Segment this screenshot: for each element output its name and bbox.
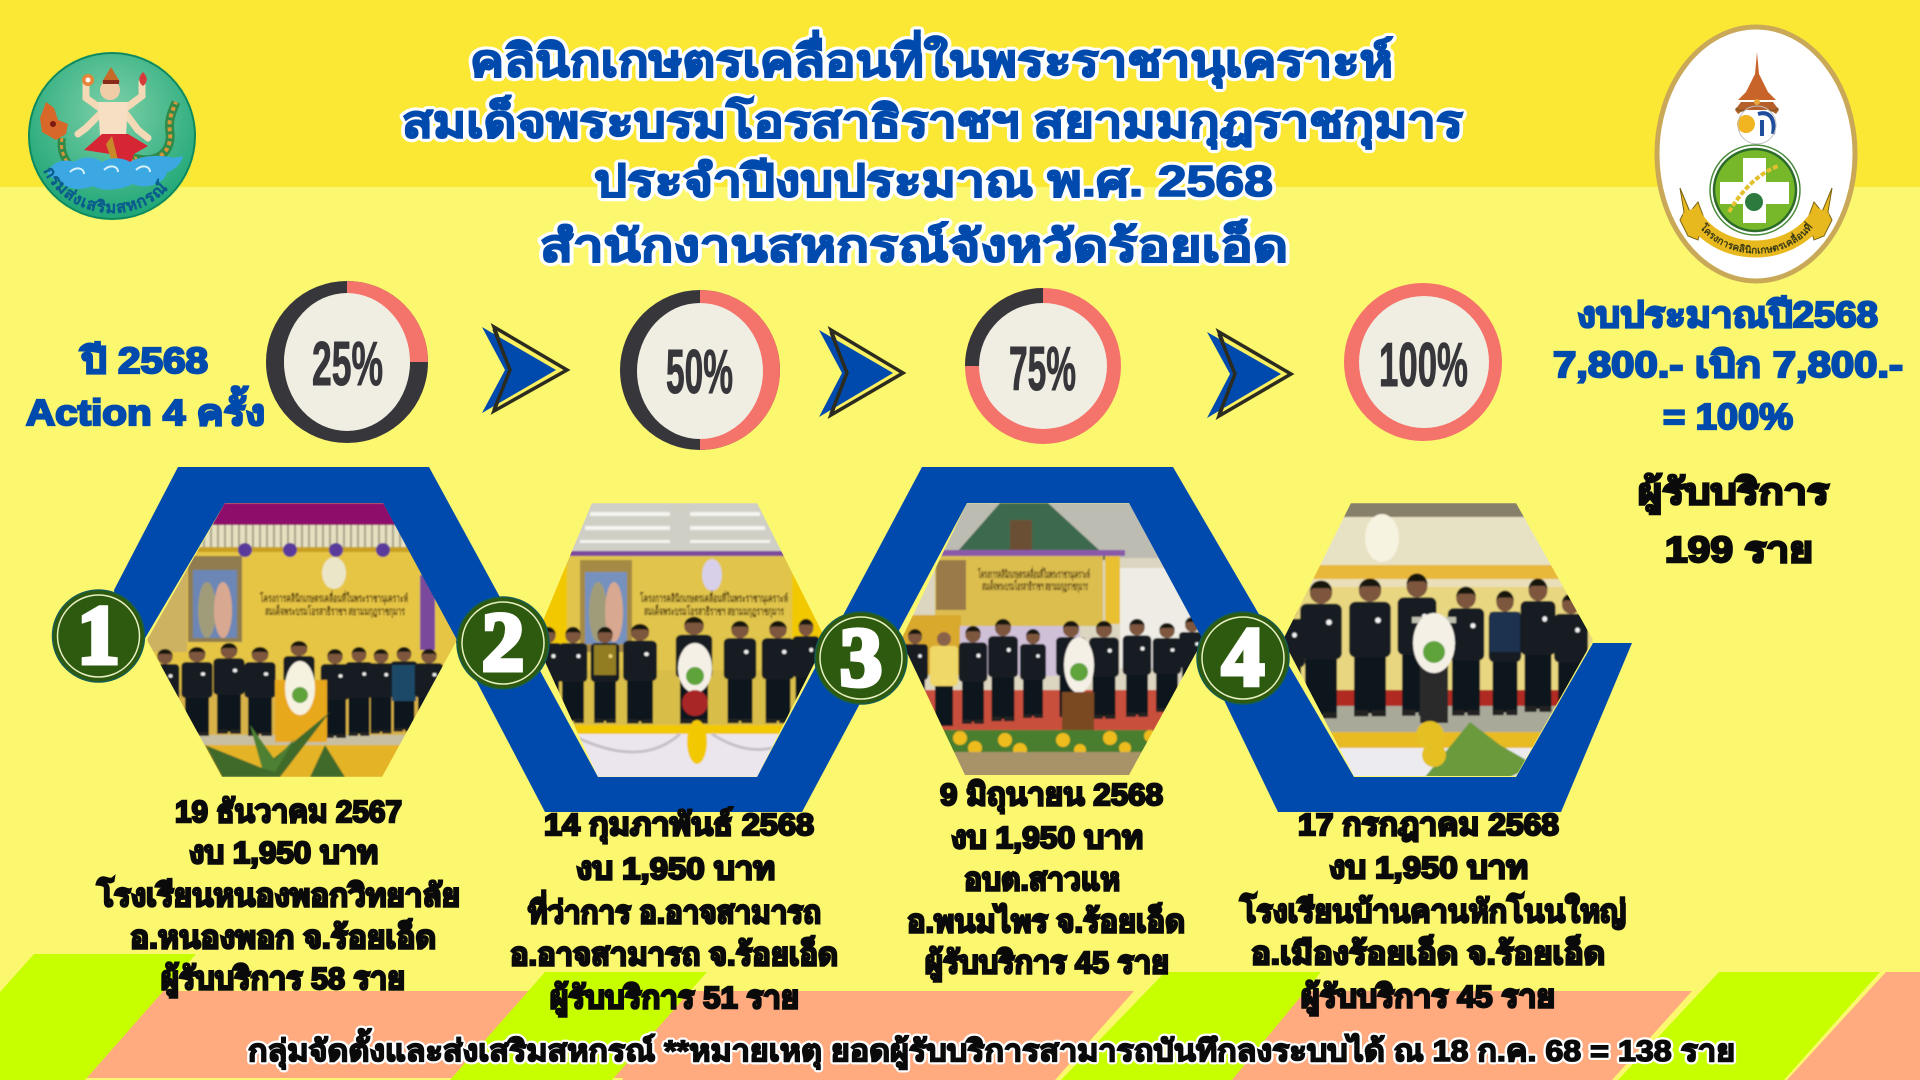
logo: Cooperative Promotion Department seal: กรมส่งเสริมสหกรณ์ [43,168,168,214]
number badge 3 [815,611,907,704]
event 4 details [1239,807,1626,1016]
event 2 details [510,807,838,1017]
title: ประจำปีงบประมาณ พ.ศ. 2568 [594,157,1273,206]
event 1 details: งบ 1,950 บาท [189,835,378,870]
title [402,30,1463,271]
event 1 details: อ.หนองพอก จ.ร้อยเอ็ด [130,918,436,955]
footer colour bands [0,954,1920,1080]
header band [0,0,1920,187]
deity arms [78,82,148,138]
number badge 1: 1 [78,589,120,682]
event 4 details: ผู้รับบริการ 45 ราย [1301,979,1555,1016]
event 1 details: โรงเรียนหนองพอกวิทยาลัย [96,877,460,913]
left label: year and actions [26,340,265,433]
event 1 details: ผู้รับบริการ 58 ราย [161,961,405,998]
photo 4 [1271,503,1593,777]
event 2 details: งบ 1,950 บาท [576,851,775,886]
gold banner [1680,188,1832,240]
photo 1: สมเด็จพระบรมโอรสาธิราชฯ สยามมกุฎราชกุมาร [265,604,405,619]
photo 1 [147,503,457,777]
photo 2 [534,503,826,777]
service recipients total: ผู้รับบริการ [1638,471,1830,515]
budget summary: = 100% [1663,396,1793,437]
footer note: กลุ่มจัดตั้งและส่งเสริมสหกรณ์ **หมายเหตุ ยอดผู้รับบริการสามารถบันทึกลงระบบได้ ณ 18 ก.ค. 68 = 138 ราย [248,1028,1735,1070]
photo 2: โครงการคลินิกเกษตรเคลื่อนที่ในพระราชานุเคราะห์ [639,590,788,606]
title: คลินิกเกษตรเคลื่อนที่ในพระราชานุเคราะห์ [470,30,1393,89]
attributes in hands [82,74,94,86]
number badge 2 [457,596,549,689]
logo: mobile agricultural clinic project [1654,24,1858,284]
spire [1738,52,1776,100]
event 3 details: งบ 1,950 บาท [951,820,1143,855]
monogram [1737,115,1755,133]
event 2 details: 14 กุมภาพันธ์ 2568 [544,807,814,844]
arrow 2 [819,330,903,417]
footer note: กลุ่มจัดตั้งและส่งเสริมสหกรณ์ **หมายเหตุ ยอดผู้รับบริการสามารถบันทึกลงระบบได้ ณ 18 ก.ค. 68 = 138 ราย [248,1028,1735,1070]
budget summary: งบประมาณปี2568 [1577,294,1878,335]
seal lettering [42,168,182,213]
photo 1: โครงการคลินิกเกษตรเคลื่อนที่ในพระราชานุเคราะห์ [259,590,408,606]
progress ring: 25% [275,290,419,434]
event 2 details: ผู้รับบริการ 51 ราย [550,980,799,1017]
title: สำนักงานสหกรณ์จังหวัดร้อยเอ็ด [540,219,1288,271]
photo 2: สมเด็จพระบรมโอรสาธิราชฯ สยามมกุฎราชกุมาร [644,604,784,619]
progress ring: 50% [629,299,771,441]
left label: year and actions: ปี 2568 [79,340,208,381]
photo 3: สมเด็จพระบรมโอรสาธิราชฯ สยามมกุฎราชกุมาร [982,579,1088,594]
number badge 3: 3 [840,611,882,704]
number badge 4 [1197,611,1289,704]
event 3 details: อ.พนมไพร จ.ร้อยเอ็ด [907,902,1185,939]
service recipients total: 199 ราย [1665,529,1813,570]
progress ring: 100% [1353,292,1493,432]
naga tail [133,102,176,160]
arrow 1 [482,327,567,413]
photo 3 [901,503,1205,777]
progress ring: 50%: 50% [666,338,733,407]
deity torso and head [98,102,128,136]
event 2 details: อ.อาจสามารถ จ.ร้อยเอ็ด [510,935,838,972]
progress ring: 100%: 100% [1379,331,1468,400]
progress ring: 25%: 25% [312,330,383,399]
logo: Cooperative Promotion Department seal [28,52,196,220]
blue hexagon ribbon [114,467,1632,812]
event 4 details: อ.เมืองร้อยเอ็ด จ.ร้อยเอ็ด [1251,934,1605,971]
green emblem with cross [1710,145,1800,235]
title: ประจำปีงบประมาณ พ.ศ. 2568 [594,157,1273,206]
event 3 details: ผู้รับบริการ 45 ราย [925,945,1169,982]
deity garment [84,134,148,172]
progress ring: 75%: 75% [1009,335,1076,404]
event 1 details [96,794,460,998]
number badge 4: 4 [1222,611,1264,704]
title: สมเด็จพระบรมโอรสาธิราชฯ สยามมกุฎราชกุมาร [402,95,1463,150]
event 4 details: 17 กรกฎาคม 2568 [1298,807,1559,842]
event 3 details [907,777,1185,982]
service recipients total [1638,471,1830,570]
budget summary: 7,800.- เบิก 7,800.- [1553,344,1903,385]
title: คลินิกเกษตรเคลื่อนที่ในพระราชานุเคราะห์ [470,30,1393,89]
event 4 details: งบ 1,950 บาท [1329,850,1528,885]
event 1 details: 19 ธันวาคม 2567 [175,794,402,829]
naga body and head [61,138,135,169]
number badge 2: 2 [482,596,524,689]
event 4 details: โรงเรียนบ้านคานหักโนนใหญ่ [1239,893,1626,930]
budget summary [1553,294,1903,437]
number badge 1 [52,589,144,682]
title: สมเด็จพระบรมโอรสาธิราชฯ สยามมกุฎราชกุมาร [402,95,1463,150]
progress ring: 75% [974,297,1112,435]
event 3 details: 9 มิถุนายน 2568 [940,777,1163,814]
title: สำนักงานสหกรณ์จังหวัดร้อยเอ็ด [540,219,1288,271]
event 2 details: ที่ว่าการ อ.อาจสามารถ [528,890,821,930]
clouds [48,156,183,190]
logo: mobile agricultural clinic project: โครงการคลินิกเกษตรเคลื่อนที่ [1702,220,1813,254]
event 3 details: อบต.สาวแห [964,862,1120,897]
left label: year and actions: Action 4 ครั้ง [26,386,265,433]
arrow 3 [1207,332,1291,418]
photo 3: โครงการคลินิกเกษตรเคลื่อนที่ในพระราชานุเคราะห์ [978,566,1090,582]
